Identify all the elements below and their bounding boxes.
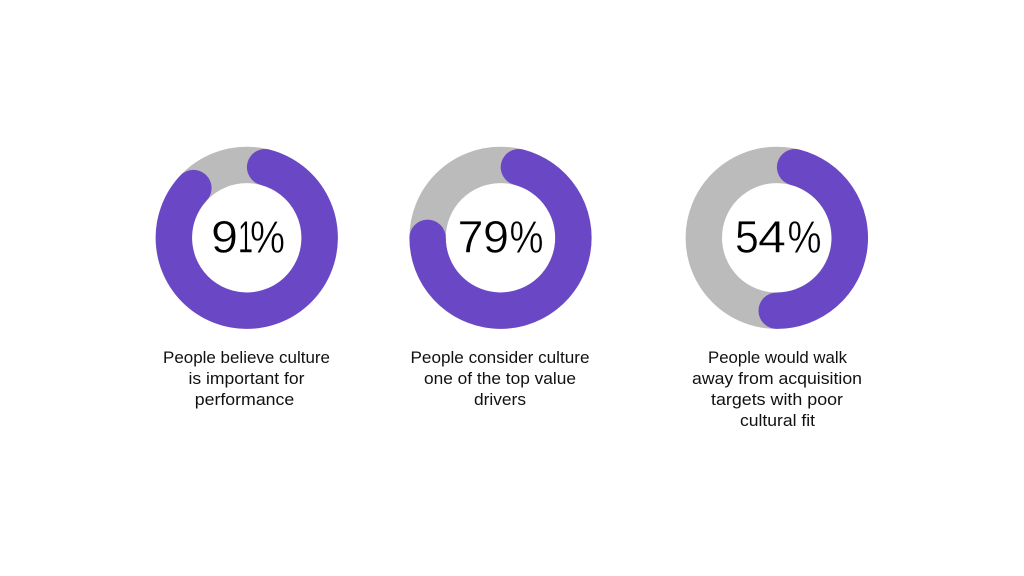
panel: 54% statistic — [692, 165, 862, 430]
panel: 91% statistic — [163, 165, 330, 409]
caption: value drivers: People consider culture — [410, 349, 590, 367]
value: 91%: 9 — [211, 212, 238, 262]
value: 54%: % — [788, 212, 822, 262]
caption: value drivers: drivers — [474, 391, 526, 409]
caption: value drivers: one of the top value — [424, 370, 576, 388]
caption: performance: performance — [195, 391, 294, 409]
donut chart: 91% — [174, 165, 320, 311]
donut chart: 79% — [428, 165, 573, 311]
value: 54%: 5 — [735, 212, 759, 262]
value: 54%: 4 — [758, 212, 786, 262]
caption: acquisition targets: People would walk — [708, 349, 848, 367]
caption: acquisition targets: away from acquisition — [692, 370, 862, 388]
caption: performance — [163, 349, 330, 409]
caption: acquisition targets: targets with poor — [711, 391, 844, 409]
caption: acquisition targets — [692, 349, 862, 430]
caption: performance: People believe culture — [163, 349, 330, 367]
value: 91%: 1 — [238, 212, 253, 262]
caption: acquisition targets: cultural fit — [740, 412, 815, 430]
panel: 79% statistic — [410, 165, 590, 409]
value: 79%: 9 — [483, 212, 509, 262]
value: 79%: 7 — [458, 212, 484, 262]
value: 79%: % — [510, 212, 544, 262]
value: 91%: % — [250, 212, 285, 262]
caption: performance: is important for — [188, 370, 305, 388]
caption: value drivers — [410, 349, 590, 409]
donut chart: 54% — [704, 165, 850, 311]
